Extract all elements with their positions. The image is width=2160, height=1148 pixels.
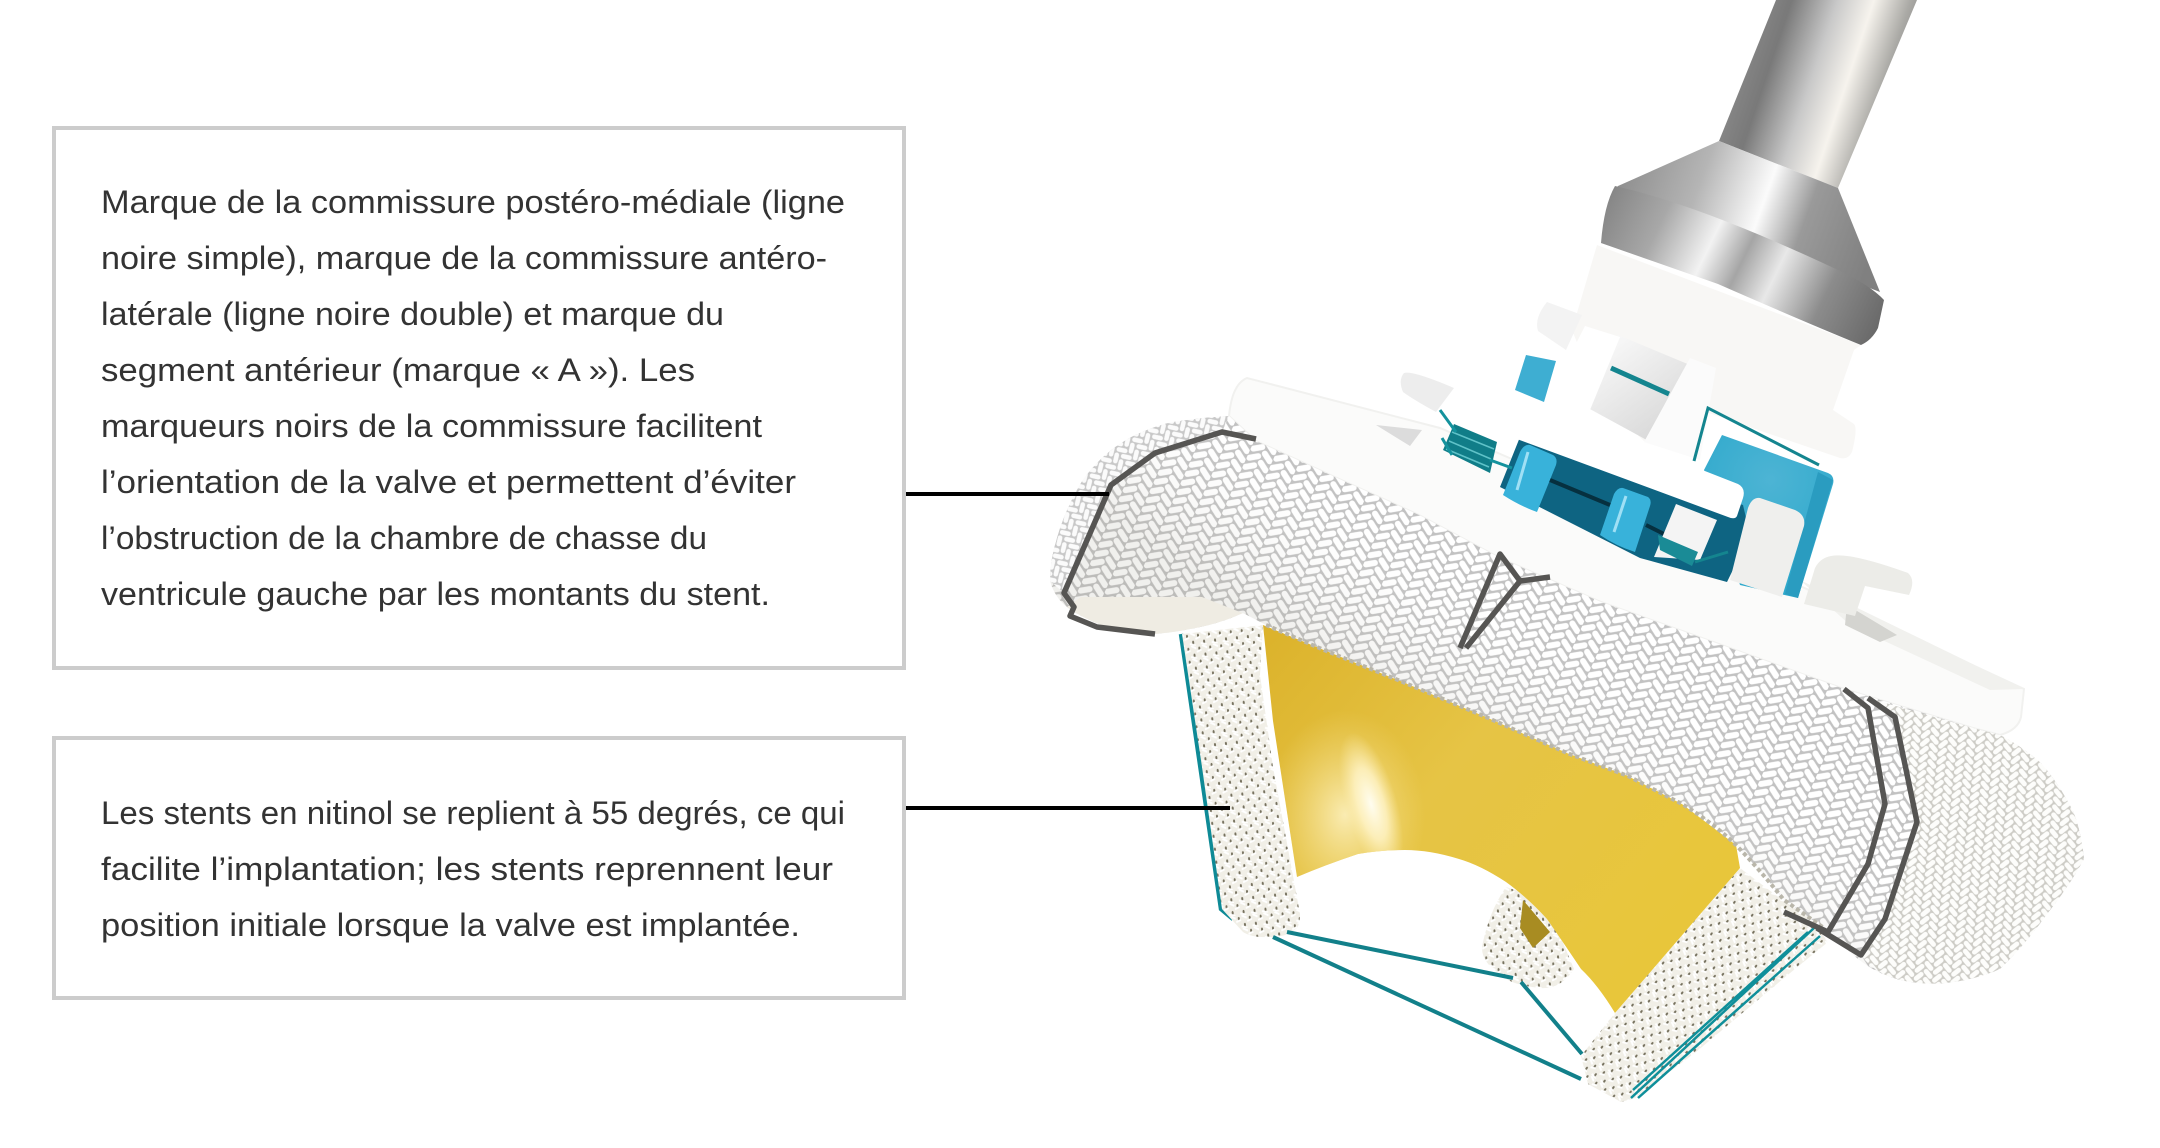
text block: commissure markers: ventricule gauche par les montants du stent.: [101, 576, 770, 612]
cuff underside fold: [1067, 597, 1250, 634]
large blue block: [1704, 435, 1833, 598]
text block: commissure markers: latérale (ligne noire double) et marque du: [101, 296, 724, 332]
dark bar: [1550, 480, 1672, 538]
text block: nitinol stents: position initiale lorsque la valve est implantée.: [101, 907, 800, 943]
white block: [1654, 504, 1717, 560]
right stent post: [1581, 868, 1828, 1102]
sewing ring disc: [1229, 378, 2024, 735]
text block: commissure markers: l’orientation de la valve et permettent d’éviter: [101, 464, 796, 500]
post 2: [1644, 358, 1716, 460]
text block: nitinol stents: [101, 795, 845, 943]
post 1: [1548, 326, 1620, 410]
middle stent post: [1482, 887, 1574, 988]
text block: commissure markers: l’obstruction de la chambre de chasse du: [101, 520, 707, 556]
text block: commissure markers: segment antérieur (marque « A »). Les: [101, 352, 695, 388]
white post: [1730, 498, 1804, 597]
yellow leaflet: [1263, 625, 1740, 1013]
cuff right end knit: [1861, 698, 2084, 984]
text block: commissure markers: Marque de la commissure postéro-médiale (ligne: [101, 184, 845, 220]
white hub: [1572, 245, 1861, 458]
black anterior marker: letter A: [1460, 554, 1550, 648]
blue pillar 2: [1600, 488, 1651, 552]
metal cone: [1615, 141, 1880, 292]
teal stent wires upper: [1611, 368, 1819, 465]
panel: commissure markers: [54, 128, 904, 668]
illustration: heart valve on holder: [1050, 0, 2084, 1102]
teal frame wires: [1273, 932, 1582, 1079]
left blue block: [1515, 355, 1556, 402]
metal collar: [1601, 186, 1884, 345]
cuff left shoulder knit: [1050, 416, 1229, 593]
leader line: commissure markers: [906, 492, 1109, 496]
hook tab: [1804, 555, 1912, 616]
teal wires on right post: [1631, 928, 1820, 1098]
text block: nitinol stents: Les stents en nitinol se replient à 55 degrés, ce qui: [101, 795, 845, 831]
metal shaft: [1719, 0, 1917, 188]
upper flange tab: [1537, 302, 1582, 350]
blue pillar 1: [1503, 445, 1557, 512]
text block: commissure markers: noire simple), marque de la commissure antéro-: [101, 240, 827, 276]
knit cuff: [1050, 416, 2084, 984]
left stent wire: [1181, 634, 1233, 919]
teal coils: [1440, 410, 1728, 566]
panel border: [54, 738, 904, 998]
text block: commissure markers: marqueurs noirs de la commissure facilitent: [101, 408, 762, 444]
text block: nitinol stents: facilite l’implantation; les stents reprennent leur: [101, 851, 833, 887]
left stent post: [1182, 625, 1300, 937]
cuff seam: [1266, 625, 1824, 928]
panel: nitinol stents: [54, 738, 904, 998]
recess between posts: [1588, 335, 1690, 445]
text block: commissure markers: [101, 184, 845, 612]
panel border: [54, 128, 904, 668]
black commissure marker: double line: [1784, 689, 1917, 955]
lower flange: [1447, 378, 1744, 518]
dark blue interior: [1500, 437, 1750, 582]
leader line: nitinol stents: [906, 806, 1230, 810]
black commissure marker: single line: [1064, 432, 1256, 634]
small left tab: [1401, 373, 1454, 412]
